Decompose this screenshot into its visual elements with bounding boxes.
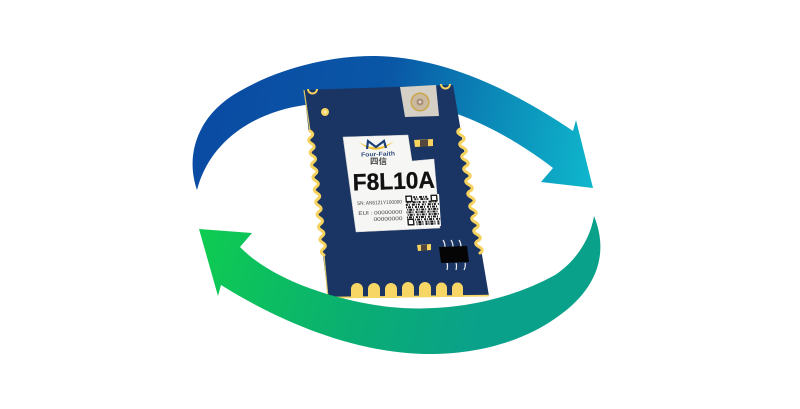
arrow: green counter-clockwise arc [199, 216, 600, 354]
label sticker [343, 135, 440, 232]
logo: 四信 [370, 156, 387, 167]
bottom pads [328, 282, 489, 298]
capacitor bottom [417, 244, 431, 251]
logo [359, 141, 395, 167]
arrow: blue clockwise arc [193, 56, 593, 190]
corner pads and mounting hole [308, 84, 450, 116]
serial number text [357, 199, 403, 224]
serial number text: SN: AN5121Y100000 [357, 199, 402, 207]
logo: Four-Faith [361, 151, 395, 159]
serial number text: 00000000 [373, 216, 403, 223]
left castellated pads [300, 131, 325, 255]
antenna connector [400, 85, 439, 117]
chip module [300, 84, 490, 298]
right castellated pads [458, 129, 490, 253]
IC chip [439, 240, 469, 270]
chip board [304, 85, 489, 298]
board edge highlights [304, 90, 328, 298]
model name: F8L10A [352, 167, 435, 195]
serial number text: EUI : 00000000 [358, 209, 403, 217]
capacitor top [414, 139, 433, 147]
QR code [404, 194, 441, 227]
